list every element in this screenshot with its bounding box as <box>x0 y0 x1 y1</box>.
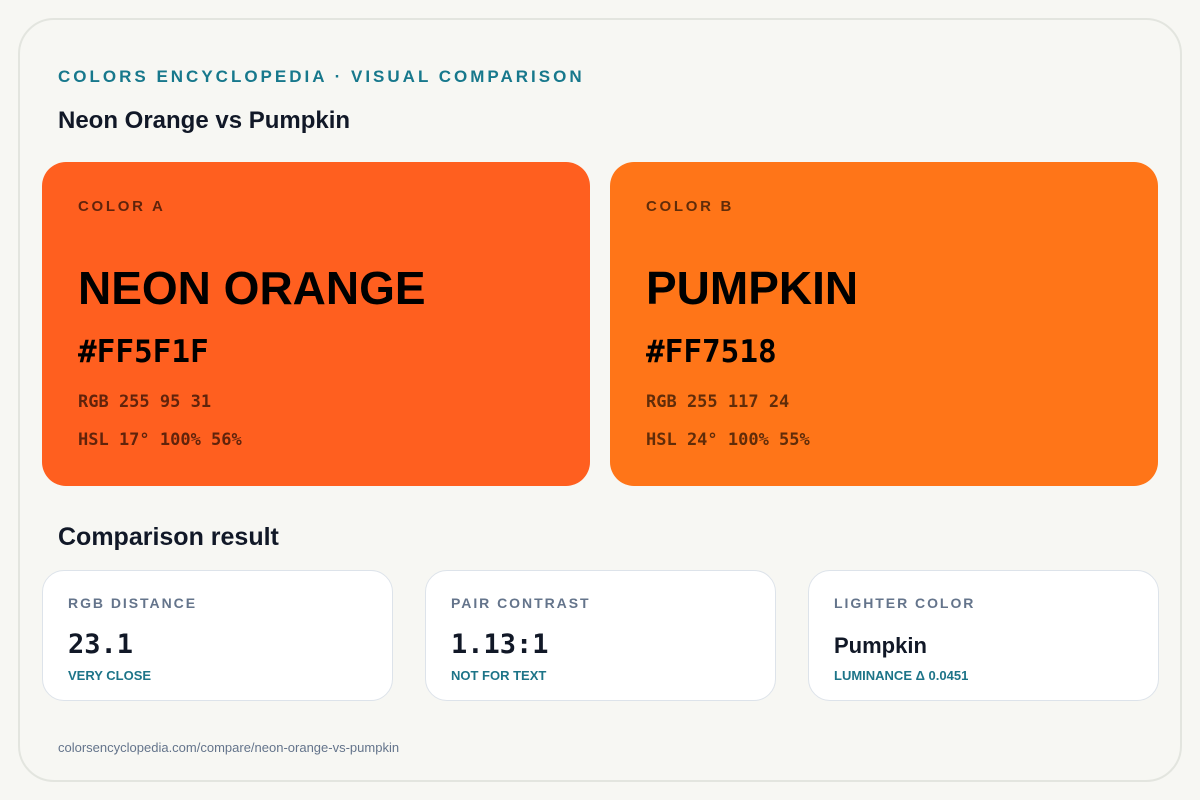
panel: pair contrast card <box>424 570 776 701</box>
RGB distance note: VERY CLOSE <box>68 668 151 683</box>
lighter color value: Pumpkin <box>834 633 927 658</box>
panel: lighter color card <box>808 570 1158 701</box>
pair contrast label: PAIR CONTRAST <box>451 595 591 611</box>
lighter color label: LIGHTER COLOR <box>834 595 975 611</box>
panel: RGB distance card <box>42 570 392 701</box>
color A RGB: RGB 255 95 31 <box>78 392 211 412</box>
RGB distance label: RGB DISTANCE <box>68 595 197 611</box>
eyebrow heading: COLORS ENCYCLOPEDIA · VISUAL COMPARISON <box>58 67 585 86</box>
color A HSL: HSL 17° 100% 56% <box>78 430 242 450</box>
pair contrast note: NOT FOR TEXT <box>451 668 546 683</box>
section heading: comparison result: Comparison result <box>58 523 279 551</box>
lighter color note: LUMINANCE Δ 0.0451 <box>834 668 968 683</box>
color B HSL: HSL 24° 100% 55% <box>646 430 810 450</box>
panel: color A swatch <box>42 162 590 486</box>
pair contrast value: 1.13:1 <box>451 629 549 660</box>
color B name: PUMPKIN <box>646 262 858 314</box>
title: Neon Orange vs Pumpkin <box>58 107 350 134</box>
color B RGB: RGB 255 117 24 <box>646 392 789 412</box>
color A hex: #FF5F1F <box>78 334 209 370</box>
color B hex: #FF7518 <box>646 334 777 370</box>
panel: color B swatch <box>610 162 1158 486</box>
footer source url: colorsencyclopedia.com/compare/neon-orange-vs-pumpkin <box>58 740 399 755</box>
RGB distance value: 23.1 <box>68 629 133 660</box>
color A name: NEON ORANGE <box>78 262 426 314</box>
color A label: COLOR A <box>78 198 166 215</box>
color B label: COLOR B <box>646 198 734 215</box>
